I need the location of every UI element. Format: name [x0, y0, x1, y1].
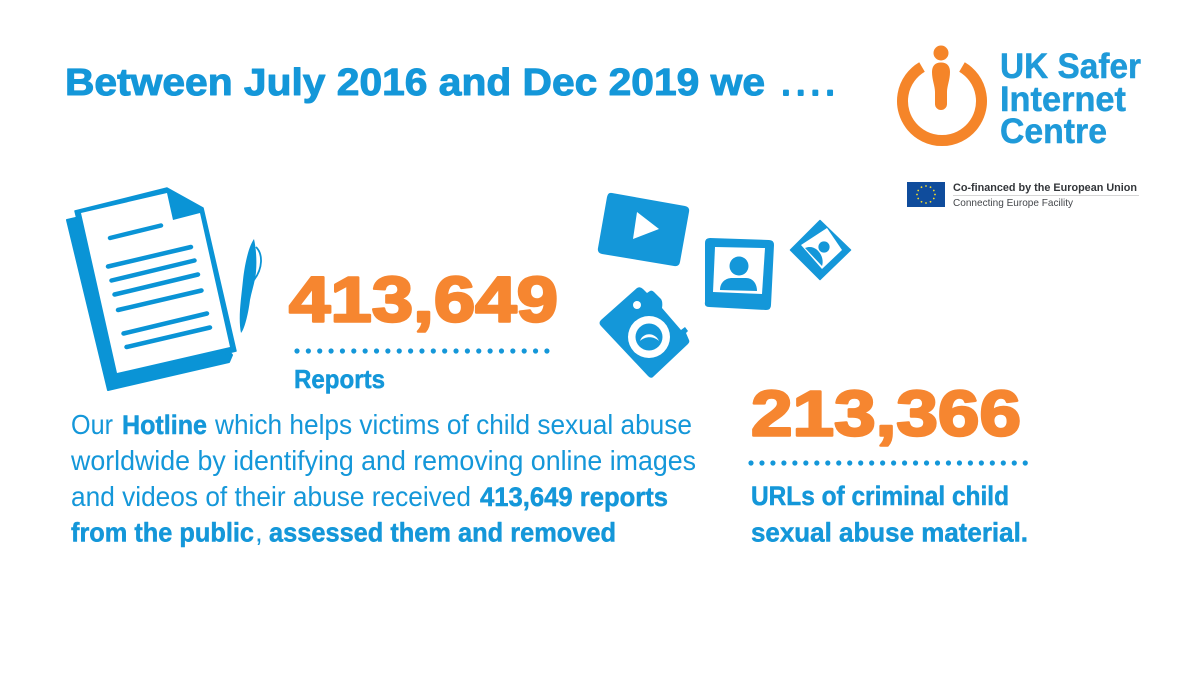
paragraph: Hotline description: which helps victims of child sexual abuse — [214, 409, 692, 440]
EU co-financing badge: Connecting Europe Facility — [953, 197, 1074, 209]
icon: power ring — [902, 67, 982, 141]
paragraph: Hotline description — [70, 409, 696, 548]
stat: 413,649 reports: 413,649 — [289, 264, 558, 336]
paragraph: Hotline description: Our — [71, 409, 113, 440]
logo wordmark: UK Safer — [1000, 47, 1141, 86]
icon: tilted photo — [790, 220, 850, 280]
logo wordmark: Internet — [1000, 80, 1126, 119]
label: URLs: sexual abuse material. — [751, 518, 1028, 548]
icon: EU flag — [907, 182, 945, 207]
logo: UK Safer Internet Centre — [902, 46, 1141, 151]
title: Between July 2016 and Dec 2019 we — [65, 62, 765, 104]
label: URLs — [751, 481, 1028, 548]
icon: person head — [934, 46, 948, 60]
text lines — [108, 226, 210, 347]
stat: 213,366 URLs: 213,366 — [751, 378, 1021, 450]
icon: camera — [600, 287, 689, 378]
EU co-financing badge — [907, 182, 1139, 209]
paragraph: Hotline description: from the public — [71, 518, 254, 548]
icon: person body — [932, 62, 950, 110]
paragraph: Hotline description: , — [255, 516, 263, 548]
stat: 213,366 URLs — [751, 378, 1028, 548]
icon: portrait photo — [705, 238, 774, 310]
EU text: Co-financed by the European Union — [953, 182, 1137, 194]
paragraph: Hotline description: worldwide by identifying and removing online images — [70, 445, 696, 476]
paragraph: Hotline description: and videos of their abuse received — [71, 481, 471, 512]
icons: media cluster — [598, 193, 850, 378]
paragraph: Hotline description: Hotline — [122, 410, 207, 440]
label: URLs: URLs of criminal child — [751, 481, 1009, 511]
front page — [75, 188, 236, 381]
logo wordmark — [1000, 47, 1141, 151]
dotted divider — [751, 460, 1026, 466]
stat: 413,649 reports — [289, 264, 558, 394]
label: Reports: Reports — [294, 364, 385, 394]
paragraph: Hotline description: assessed them and removed — [269, 518, 616, 548]
icon: video — [598, 193, 689, 266]
icon: document and pen — [67, 188, 261, 390]
pen — [240, 239, 256, 333]
dotted divider — [297, 348, 548, 354]
paragraph: Hotline description: 413,649 reports — [480, 482, 668, 512]
logo wordmark: Centre — [1000, 112, 1107, 151]
back page — [67, 210, 232, 390]
title: .... — [780, 58, 839, 104]
